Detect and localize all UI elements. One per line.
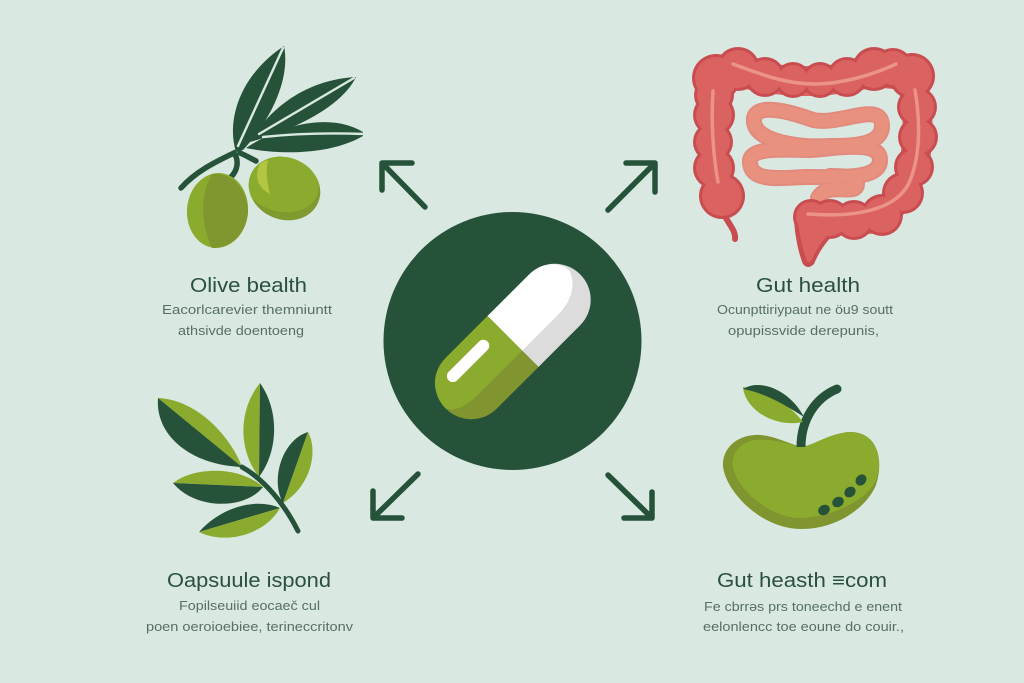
body: capsule line 1: Fopilseuiid eocaeč cul (179, 598, 320, 613)
icon: colon and small intestine (692, 47, 938, 267)
icon: green apple (723, 384, 879, 529)
text block: bottom right (703, 569, 904, 634)
arrow: top left (382, 163, 425, 207)
heading: gut: Gut health (756, 274, 860, 297)
colon body under-layer (714, 72, 918, 220)
colon tail (724, 215, 735, 239)
arrow: top right (608, 163, 655, 210)
infographic canvas (146, 46, 938, 634)
icon: capsule (420, 249, 606, 434)
heading: capsule: Oapsuule ispond (167, 569, 331, 592)
icon: olive branch (181, 46, 364, 251)
large intestine fill (695, 50, 935, 237)
central capsule badge (384, 212, 642, 470)
arrow: bottom right (608, 475, 652, 518)
body: capsule line 2: poen oeroioebiee, terineccritonv (146, 619, 354, 634)
body: olive line 1: Eacorlcarevier themniuntt (162, 302, 332, 317)
apple seeds (816, 472, 869, 517)
text block: top left (162, 274, 332, 338)
body: olive line 2: athsivde doentoeng (178, 323, 304, 338)
colon highlights (712, 64, 919, 215)
body: apple line 1: Fe cbrrəs prs toneechd e enent (704, 599, 902, 614)
large intestine outline (692, 47, 938, 267)
body: apple line 2: eelonlencc toe eoune do couir., (703, 619, 904, 634)
body: gut line 1: Ocunpttiriypaut ne öu9 soutt (717, 302, 893, 317)
small intestine (750, 110, 882, 198)
olive: right (248, 156, 320, 220)
text block: top right (717, 274, 893, 338)
text block: bottom left (146, 569, 354, 634)
heading: olive: Olive bealth (190, 274, 307, 297)
arrow: bottom left (373, 474, 418, 518)
heading: gut health com: Gut heasth ≡com (717, 569, 887, 592)
olive: left (184, 170, 251, 251)
icon: leafy sprig (158, 383, 312, 538)
body: gut line 2: opupissvide derepunis, (728, 323, 879, 338)
